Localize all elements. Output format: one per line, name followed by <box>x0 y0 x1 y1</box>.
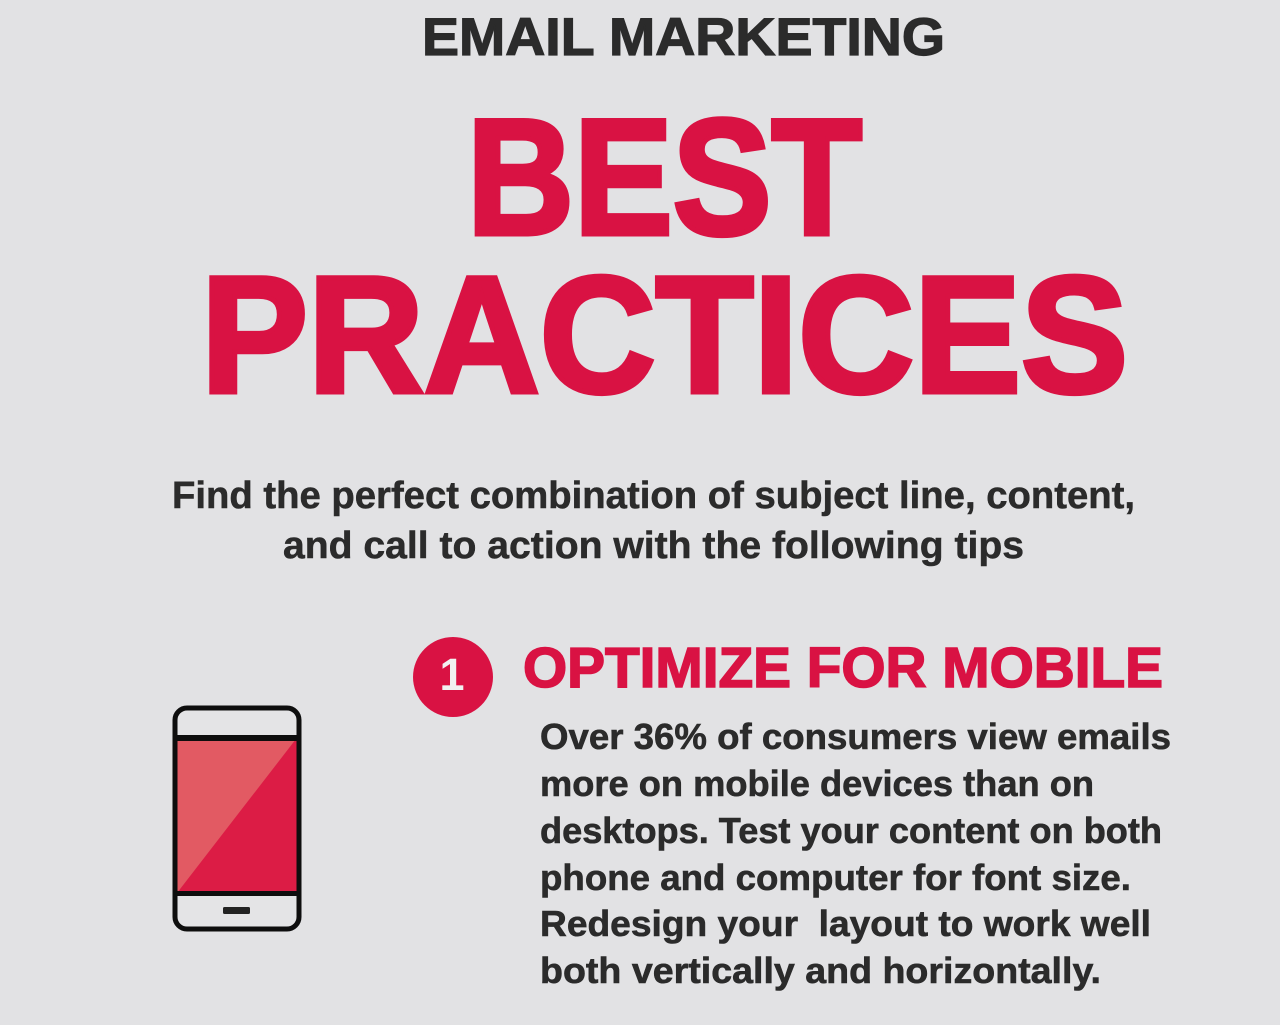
section heading: OPTIMIZE FOR MOBILE <box>523 636 1163 700</box>
intro text: and call to action with the following tips <box>283 525 1024 567</box>
intro text: Find the perfect combination of subject line, content, <box>172 475 1135 517</box>
section body text: Over 36% of consumers view emails <box>540 716 1171 757</box>
section body text: desktops. Test your content on both <box>540 810 1162 851</box>
icon: mobile phone <box>175 708 299 929</box>
section body text: more on mobile devices than on <box>540 763 1094 804</box>
main title <box>201 85 1128 428</box>
section body text: phone and computer for font size. <box>540 857 1131 898</box>
number badge 1 <box>413 637 493 717</box>
section body text: Redesign your layout to work well <box>540 903 1151 944</box>
number badge 1: 1 <box>439 649 465 700</box>
intro text <box>172 475 1135 567</box>
eyebrow heading: EMAIL MARKETING <box>422 8 945 67</box>
main title: BEST <box>467 85 862 269</box>
main title: PRACTICES <box>201 243 1128 428</box>
section body text <box>540 716 1171 991</box>
section body text: both vertically and horizontally. <box>540 950 1101 991</box>
